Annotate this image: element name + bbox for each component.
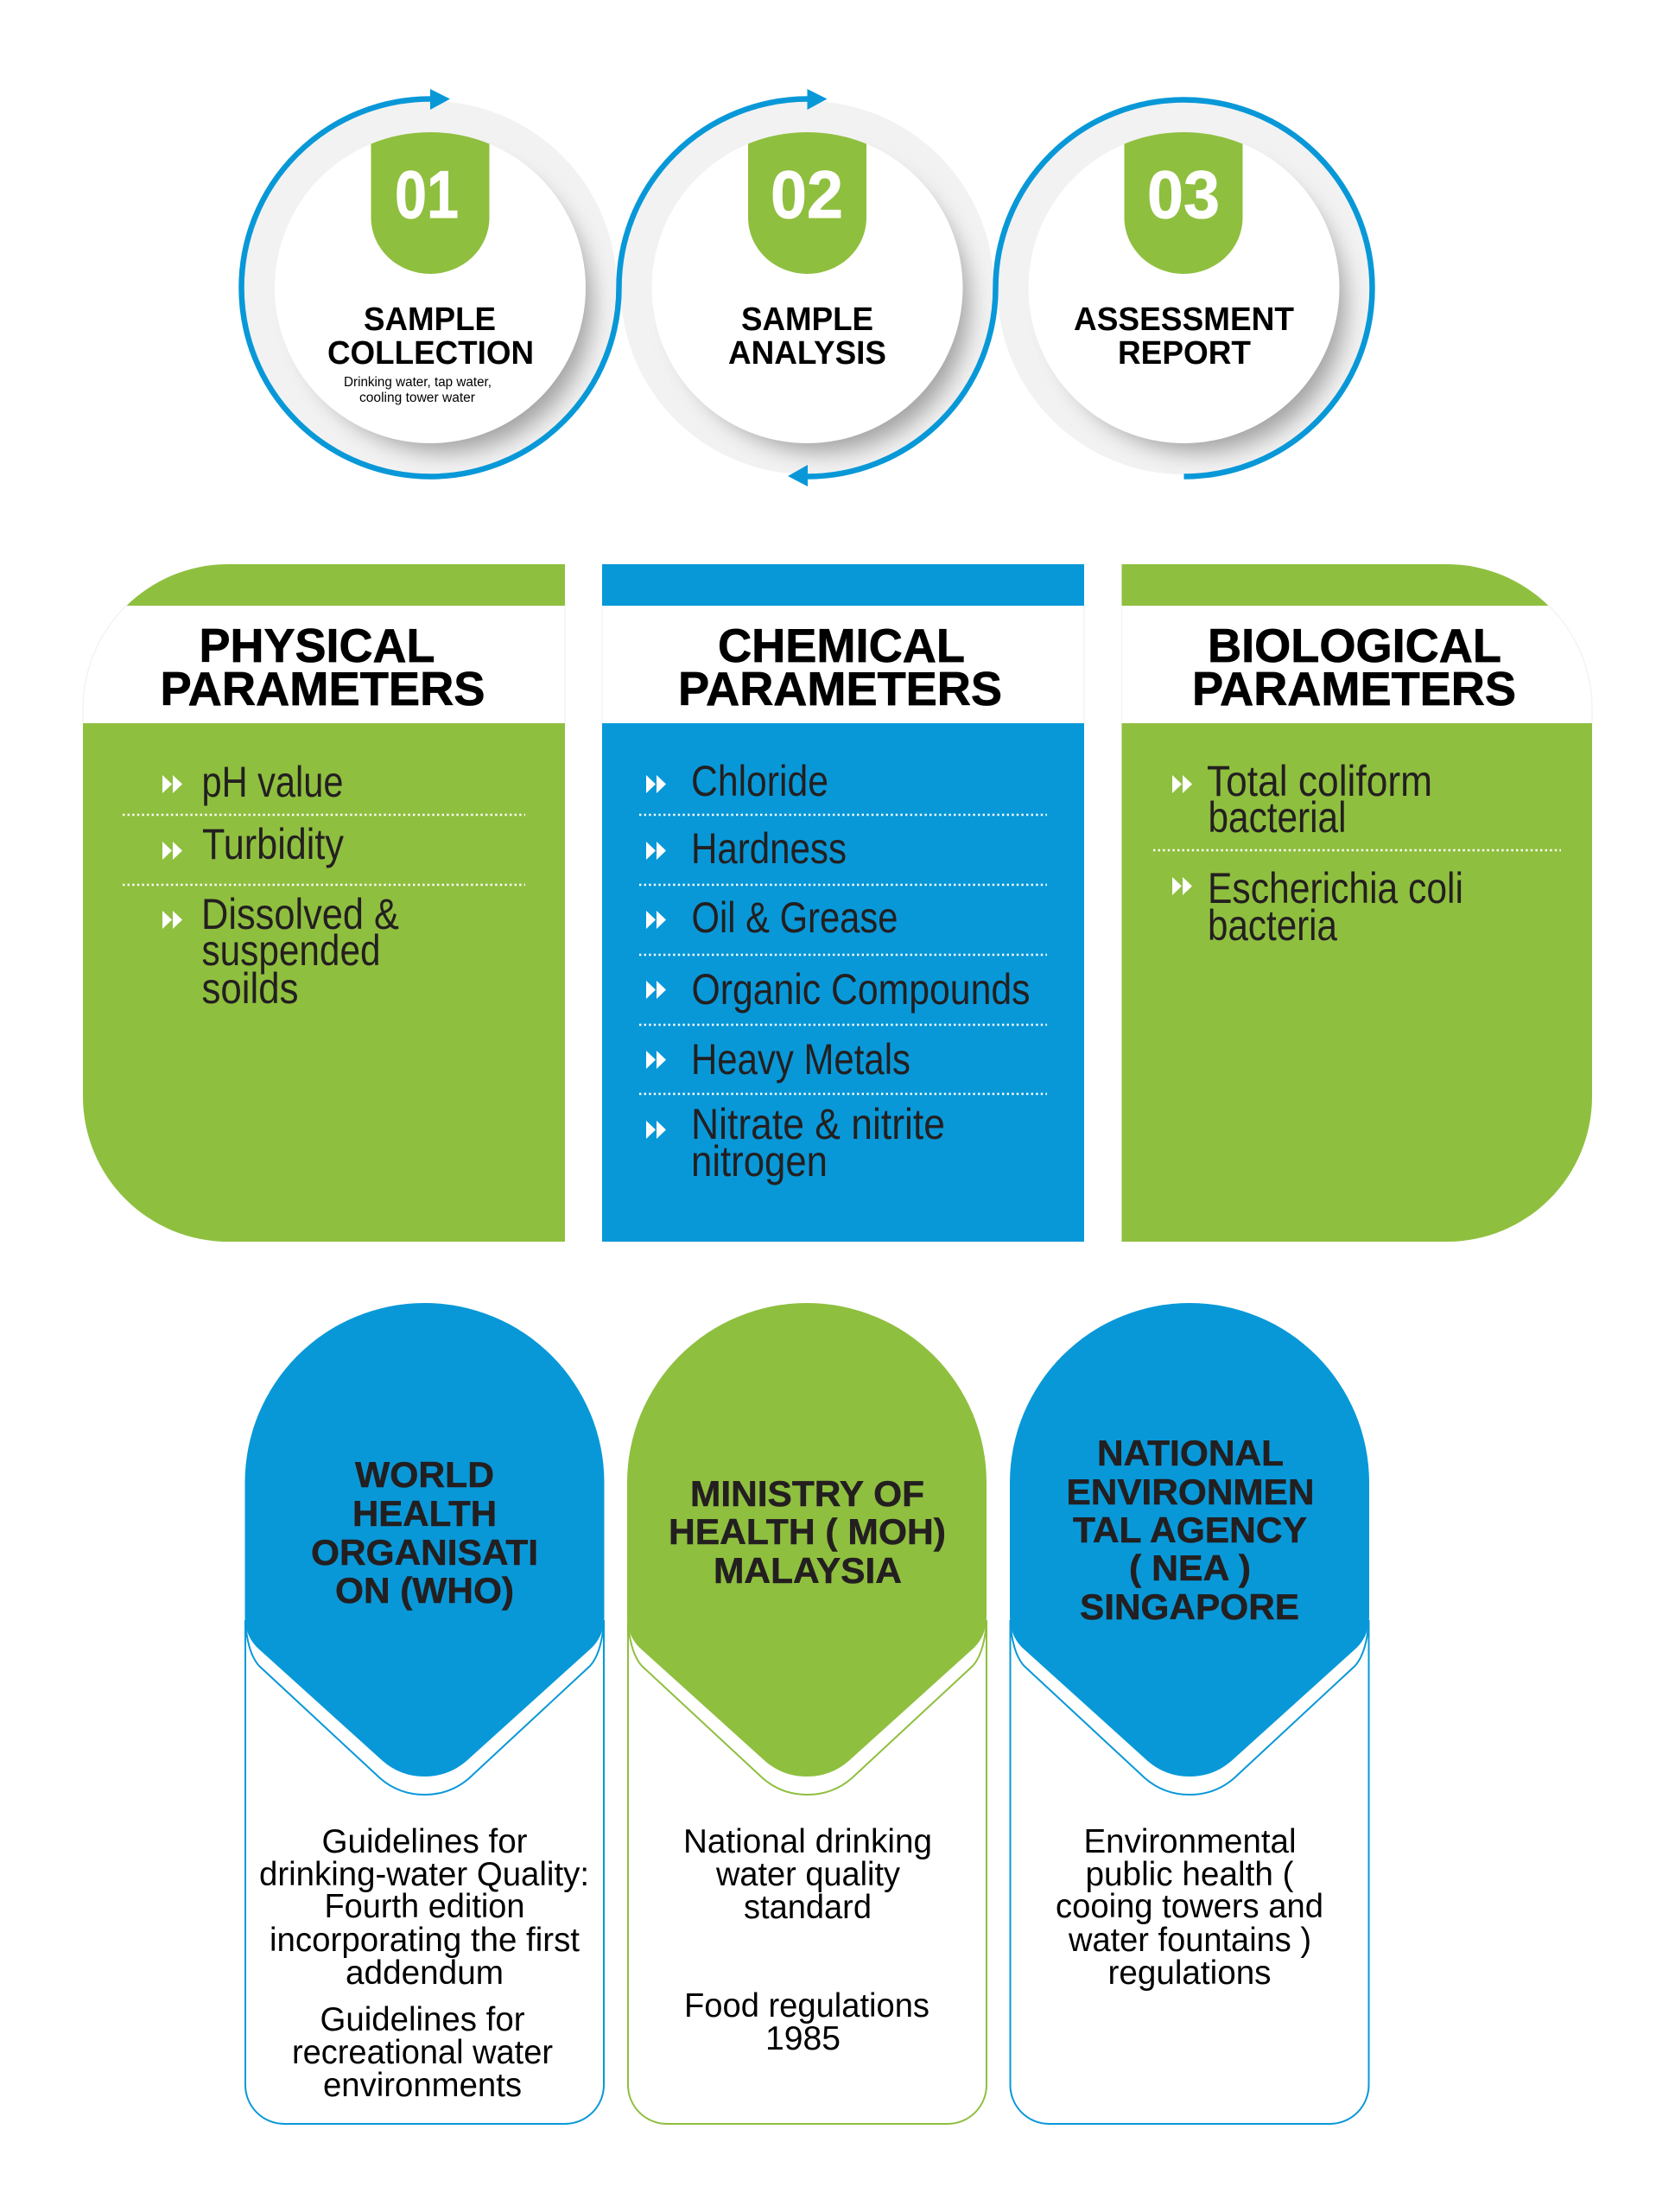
regulations text: water quality [715, 1856, 900, 1893]
regulations text: National drinking [683, 1823, 932, 1860]
item: dissolved and suspended solids [162, 890, 399, 1013]
organisation name: ORGANISATI [311, 1532, 538, 1573]
organisation name [1066, 1433, 1315, 1627]
heading [161, 619, 485, 715]
guidelines text: Fourth edition [325, 1888, 525, 1925]
arrow: step 2 to step 3 [788, 99, 1372, 486]
item: chloride [646, 757, 828, 805]
heading: PARAMETERS [678, 662, 1002, 715]
regulations text: standard [744, 1889, 872, 1926]
item: heavy metals: Heavy Metals [691, 1035, 910, 1084]
guidelines text: recreational water [292, 2034, 553, 2071]
guidelines text: Guidelines for [321, 1823, 527, 1860]
item: dissolved and suspended solids: suspended [202, 926, 380, 975]
regulations text: Environmental [1083, 1823, 1296, 1860]
arrow: step 1 to step 2 [241, 89, 827, 477]
step 3: assessment report [997, 101, 1370, 474]
heading [678, 619, 1002, 715]
guidelines text: addendum [346, 1955, 504, 1992]
heading: BIOLOGICAL [1208, 619, 1501, 672]
panel: chemical parameters [602, 564, 1084, 1242]
heading: PARAMETERS [161, 662, 485, 715]
organisation name: HEALTH ( MOH) [669, 1511, 946, 1552]
organisation name [669, 1473, 946, 1591]
item: turbidity [162, 820, 344, 868]
item: oil and grease: Oil & Grease [691, 893, 898, 942]
panel: biological parameters [1121, 564, 1592, 1242]
step 2: sample analysis: ANALYSIS [728, 335, 886, 372]
process steps [241, 89, 1372, 486]
item: nitrate and nitrite nitrogen: Nitrate & nitrite [691, 1100, 945, 1148]
item: total coliform bacterial [1172, 757, 1432, 842]
step 1: sample collection: COLLECTION [327, 335, 534, 372]
item: hardness: Hardness [691, 824, 847, 873]
organisation name [311, 1454, 538, 1611]
organisation name: HEALTH [352, 1493, 497, 1534]
item: escherichia coli bacteria [1172, 864, 1463, 950]
guidelines text: Guidelines for [320, 2001, 525, 2038]
organisation name: MALAYSIA [714, 1550, 902, 1591]
heading: PHYSICAL [199, 619, 435, 672]
guidelines text: incorporating the first [270, 1922, 580, 1959]
item: total coliform bacterial: Total coliform [1207, 757, 1432, 805]
step 2: sample analysis: SAMPLE [741, 302, 873, 338]
regulations text: cooing towers and [1056, 1888, 1323, 1925]
item: escherichia coli bacteria: bacteria [1208, 901, 1337, 950]
item: nitrate and nitrite nitrogen: nitrogen [691, 1137, 828, 1185]
regulations text: water fountains ) [1068, 1922, 1311, 1959]
regulations text: public health ( [1085, 1856, 1294, 1893]
organisation name: WORLD [355, 1454, 494, 1495]
item: pH value: pH value [202, 758, 344, 806]
regulations text [683, 1823, 932, 2057]
guidelines text: environments [323, 2067, 522, 2104]
step 3: assessment report: 03 [1147, 156, 1220, 232]
organisation name: SINGAPORE [1080, 1586, 1299, 1627]
step 2: sample analysis: 02 [771, 156, 843, 232]
step 1: sample collection: cooling tower water [359, 391, 475, 405]
regulations text: Food regulations [684, 1987, 929, 2024]
card: Ministry of Health Malaysia [627, 1303, 987, 2124]
regulations text: regulations [1107, 1955, 1272, 1992]
regulations text: 1985 [765, 2020, 841, 2057]
step 3: assessment report: ASSESSMENT [1074, 302, 1294, 338]
organisation name: TAL AGENCY [1073, 1510, 1307, 1550]
item: dissolved and suspended solids: Dissolved & [201, 890, 399, 938]
step 3: assessment report: REPORT [1118, 335, 1251, 372]
item: total coliform bacterial: bacterial [1208, 793, 1346, 842]
item: escherichia coli bacteria: Escherichia coli [1208, 864, 1463, 912]
card: World Health Organisation [245, 1303, 605, 2124]
item: pH value [162, 758, 344, 806]
organisation name: MINISTRY OF [690, 1473, 924, 1514]
item: chloride: Chloride [691, 757, 828, 805]
item: dissolved and suspended solids: soilds [202, 964, 299, 1013]
heading [1192, 619, 1516, 715]
step 2: sample analysis [620, 101, 993, 474]
item: turbidity: Turbidity [202, 820, 344, 868]
item: organic compounds: Organic Compounds [691, 965, 1030, 1014]
heading: PARAMETERS [1192, 662, 1516, 715]
regulations text [1056, 1823, 1323, 1992]
step 1: sample collection: 01 [395, 156, 459, 232]
step 1: sample collection: Drinking water, tap water, [344, 375, 492, 390]
heading: CHEMICAL [718, 619, 965, 672]
guidelines text [259, 1823, 589, 2104]
organisation name: ON (WHO) [335, 1570, 514, 1611]
item: hardness [646, 824, 847, 873]
guidelines text: drinking-water Quality: [259, 1856, 589, 1893]
organisation name: NATIONAL [1097, 1433, 1284, 1473]
item: nitrate and nitrite nitrogen [646, 1100, 945, 1185]
card: National Environment Agency Singapore [1010, 1303, 1369, 2124]
step 1: sample collection: SAMPLE [364, 302, 496, 338]
organisation name: ENVIRONMEN [1066, 1471, 1315, 1512]
organisation name: ( NEA ) [1129, 1548, 1251, 1588]
panel: physical parameters [83, 564, 565, 1242]
step 1: sample collection [244, 101, 617, 474]
